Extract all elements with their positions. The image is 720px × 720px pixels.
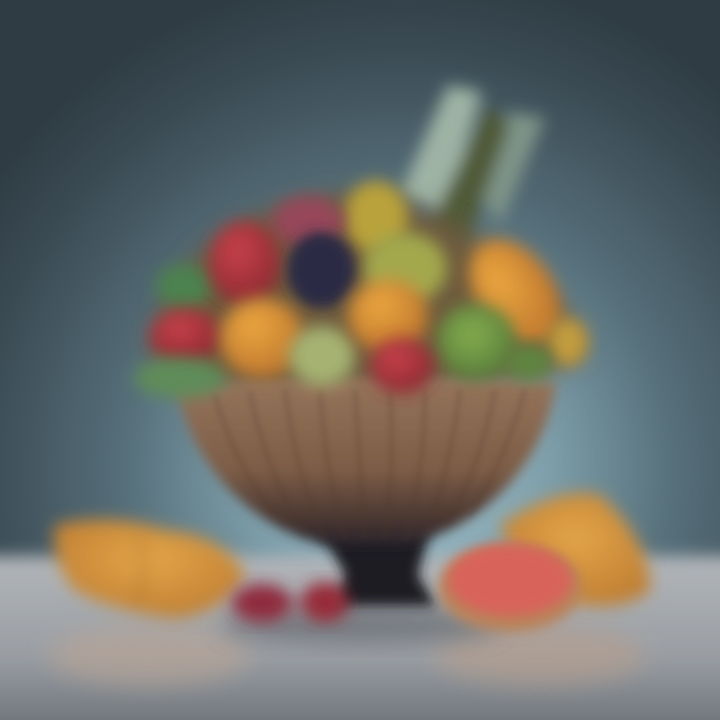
pink fruit back [272, 196, 344, 248]
yellow fruit [344, 181, 408, 253]
bowl weave ribs [215, 390, 525, 540]
left melon slices [54, 520, 245, 618]
lime-yellow fruit [363, 232, 447, 304]
green apple [436, 304, 516, 380]
bowl [176, 378, 556, 545]
plum [287, 232, 355, 308]
red fruit centre [370, 338, 434, 394]
bowl stem and base [320, 530, 436, 606]
raspberries on table [232, 582, 349, 622]
pale green fruit [289, 326, 355, 386]
grapefruit slice [438, 544, 582, 632]
orange fruit right [451, 223, 579, 361]
backing of the fruit pile [150, 194, 585, 395]
green leaf left [156, 264, 212, 308]
yellow fruit far right [548, 318, 588, 366]
orange fruit centre [348, 279, 428, 353]
fruit pile [134, 181, 588, 398]
green leaves low left [134, 358, 226, 398]
red fruit [209, 221, 281, 305]
right mango [500, 493, 650, 606]
orange fruit centre-left [220, 298, 304, 378]
table surface [0, 556, 720, 720]
strawberry left [150, 309, 222, 363]
pineapple leaves [400, 85, 545, 250]
